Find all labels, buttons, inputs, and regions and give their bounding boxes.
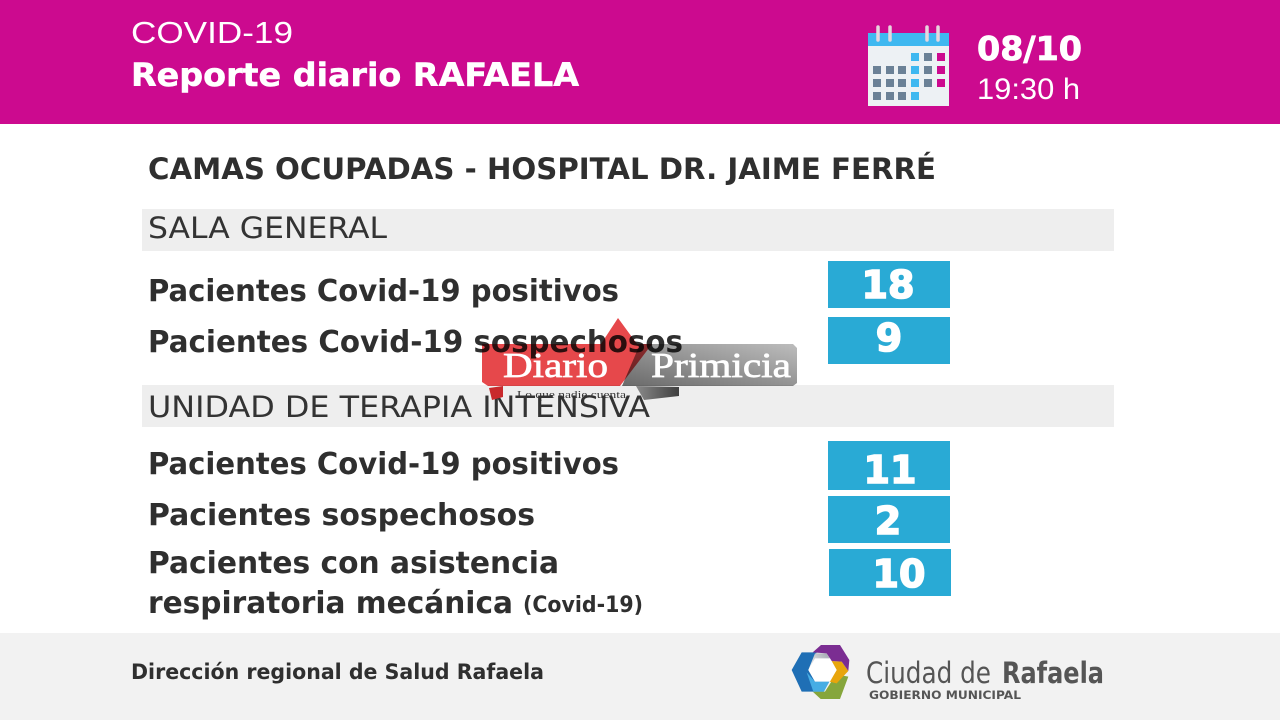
footer band	[0, 633, 1280, 720]
row: asistencia respiratoria 10: (Covid-19)	[523, 593, 643, 618]
panel: unidad de terapia intensiva	[142, 385, 1114, 621]
row: positivos 18: 18	[862, 263, 914, 307]
row: asistencia respiratoria 10: Pacientes con asistencia	[148, 546, 559, 581]
row: asistencia respiratoria 10: respiratoria mecánica	[148, 586, 513, 621]
row: positivos 11	[148, 441, 950, 492]
row: positivos 18	[148, 261, 950, 309]
row: positivos 11: Pacientes Covid-19 positivos	[148, 447, 619, 482]
panel: sala general	[142, 209, 1114, 364]
row: sospechosos 2: Pacientes sospechosos	[148, 498, 535, 533]
date and time	[977, 29, 1082, 106]
header title	[131, 15, 579, 94]
section bar: terapia intensiva	[142, 385, 1114, 427]
icon: calendar	[868, 27, 949, 106]
watermark: Diario Primicia	[482, 318, 797, 401]
row: sospechosos 2	[148, 496, 950, 543]
row: positivos 11: 11	[864, 448, 916, 492]
header title: Reporte diario RAFAELA	[131, 56, 579, 94]
row: sospechosos 9: Pacientes Covid-19 sospechosos	[148, 325, 683, 360]
row: asistencia respiratoria 10: 10	[873, 552, 925, 596]
section bar: sala general: SALA GENERAL	[148, 211, 387, 245]
header band	[0, 0, 1280, 124]
row: sospechosos 9	[148, 316, 950, 364]
heading: hospital: CAMAS OCUPADAS - HOSPITAL DR. JAIME FERRÉ	[148, 152, 936, 186]
watermark: Diario Primicia: Primicia	[651, 346, 792, 385]
row: positivos 18: Pacientes Covid-19 positivos	[148, 274, 619, 309]
footer credit: Dirección regional de Salud Rafaela	[131, 660, 544, 684]
date and time: 19:30 h	[977, 73, 1080, 106]
logo: Ciudad de Rafaela: Ciudad de	[866, 656, 991, 690]
date and time: 08/10	[977, 29, 1082, 68]
row: sospechosos 2: 2	[875, 499, 901, 543]
logo: Ciudad de Rafaela: GOBIERNO MUNICIPAL	[869, 688, 1022, 702]
watermark: Diario Primicia: Diario	[503, 346, 608, 385]
section bar: sala general	[142, 209, 1114, 251]
logo: Ciudad de Rafaela: Rafaela	[1002, 656, 1104, 690]
row: asistencia respiratoria 10	[148, 546, 951, 621]
header title: COVID-19	[131, 15, 293, 50]
row: sospechosos 9: 9	[876, 316, 902, 360]
logo: Ciudad de Rafaela	[792, 645, 1104, 702]
watermark: Diario Primicia: Lo que nadie cuenta	[517, 389, 626, 401]
section bar: terapia intensiva: UNIDAD DE TERAPIA INTENSIVA	[148, 390, 650, 424]
